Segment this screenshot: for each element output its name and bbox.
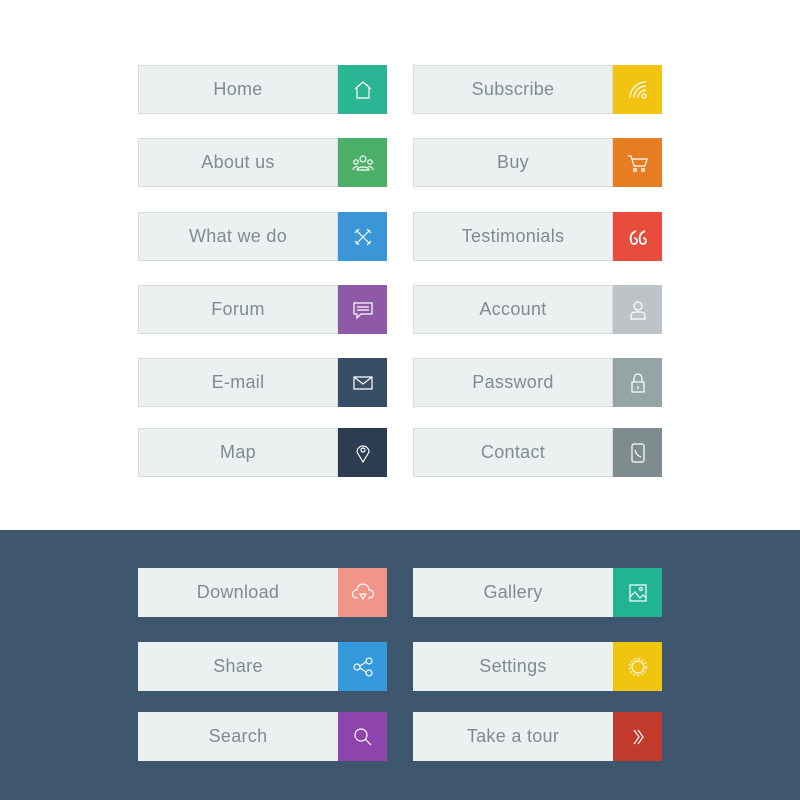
button: Forum: Forum [211,299,265,319]
button: Home [138,65,387,114]
button: Subscribe [413,65,662,114]
icon: lock [613,358,662,407]
button: Take a tour: Take a tour [467,726,559,746]
button: Contact [413,428,662,477]
button: E-mail [138,358,387,407]
button: Search: Search [209,726,267,746]
button: What we do [138,212,387,261]
button: Home: Home [213,79,263,99]
button: Share [138,642,387,691]
icon: tools [338,212,387,261]
button: Gallery [413,568,662,617]
button: Password: Password [472,372,554,392]
button: Account: Account [479,299,547,319]
icon: cart [613,138,662,187]
button: Testimonials: Testimonials [462,226,564,246]
button: Buy [413,138,662,187]
button: Gallery: Gallery [483,582,543,602]
icon: chat [338,285,387,334]
icon: gear [613,642,662,691]
icon: phone [613,428,662,477]
button: Map: Map [220,442,256,462]
button: Contact: Contact [481,442,545,462]
icon: chevrons [613,712,662,761]
button: Testimonials [413,212,662,261]
button: What we do: What we do [189,226,287,246]
icon: share [338,642,387,691]
button: Forum [138,285,387,334]
icon: cloud download [338,568,387,617]
button: Password [413,358,662,407]
icon: envelope [338,358,387,407]
button: Map [138,428,387,477]
button: Share: Share [213,656,263,676]
button: Download [138,568,387,617]
icon: people [338,138,387,187]
button: Settings [413,642,662,691]
icon: user [613,285,662,334]
button: Take a tour [413,712,662,761]
button: Download: Download [197,582,279,602]
dark panel [0,530,800,800]
button: Subscribe: Subscribe [472,79,554,99]
button: Settings: Settings [479,656,547,676]
button: Account [413,285,662,334]
button: About us [138,138,387,187]
button: Buy: Buy [497,152,529,172]
icon: rss [613,65,662,114]
button: Search [138,712,387,761]
button: E-mail: E-mail [212,372,264,392]
button: About us: About us [201,152,275,172]
icon: quote [613,212,662,261]
icon: picture [613,568,662,617]
icon: magnifier [338,712,387,761]
icon: pin [338,428,387,477]
icon: house [338,65,387,114]
